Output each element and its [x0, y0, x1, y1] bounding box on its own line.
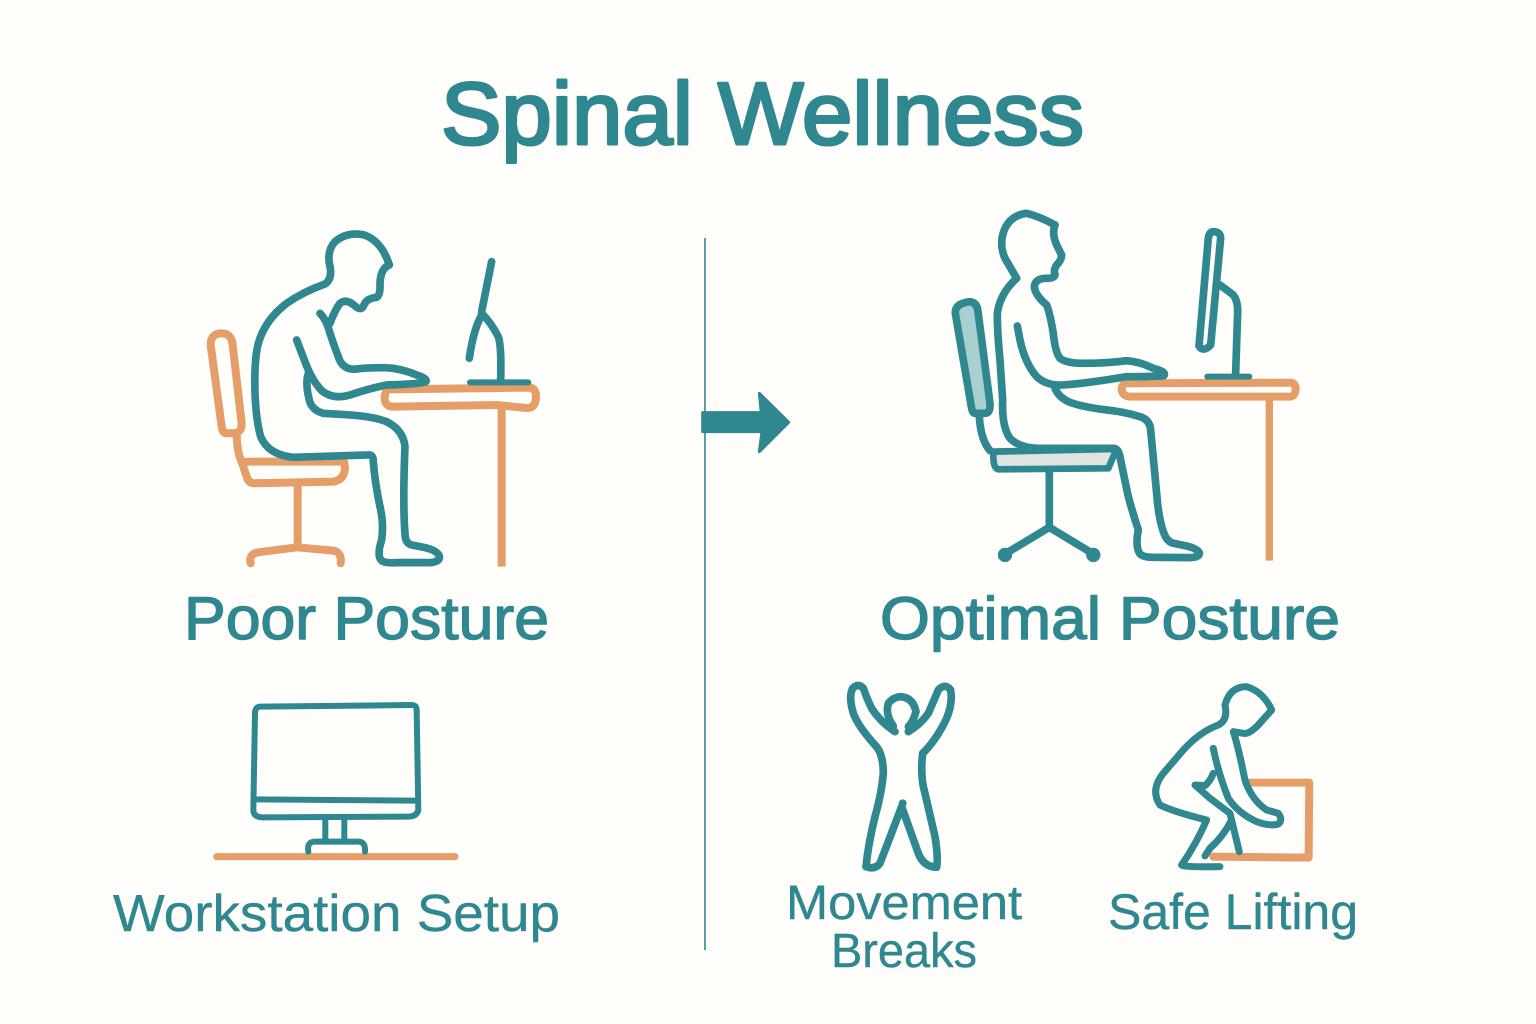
illustration: optimal posture	[955, 213, 1296, 561]
label: movement breaks	[786, 877, 1022, 978]
icon: movement figure with raised arms	[851, 685, 951, 868]
desk	[1122, 383, 1296, 561]
desk	[385, 388, 536, 567]
seated figure, upright	[997, 213, 1199, 558]
chair	[955, 302, 1117, 558]
title: Spinal Wellness	[441, 64, 1084, 163]
monitor screen and stand	[253, 705, 418, 852]
monitor	[469, 262, 528, 382]
chair	[211, 333, 345, 563]
icon: safe lifting figure with box	[1156, 687, 1309, 867]
label: optimal posture: Optimal Posture	[880, 585, 1340, 652]
label: safe lifting: Safe Lifting	[1108, 884, 1358, 940]
center divider line	[704, 238, 706, 950]
box	[1213, 783, 1309, 858]
label: movement breaks: Breaks	[831, 925, 977, 978]
label: workstation setup: Workstation Setup	[113, 885, 560, 943]
illustration: poor posture	[211, 234, 536, 567]
seated figure, slouched	[255, 234, 439, 563]
arrow: poor to optimal	[703, 393, 789, 452]
desk line	[217, 846, 455, 867]
squatting figure	[1156, 687, 1281, 867]
icon: workstation monitor	[217, 705, 455, 857]
label: poor posture: Poor Posture	[184, 585, 549, 652]
label: movement breaks: Movement	[786, 877, 1022, 930]
monitor	[1199, 232, 1249, 377]
